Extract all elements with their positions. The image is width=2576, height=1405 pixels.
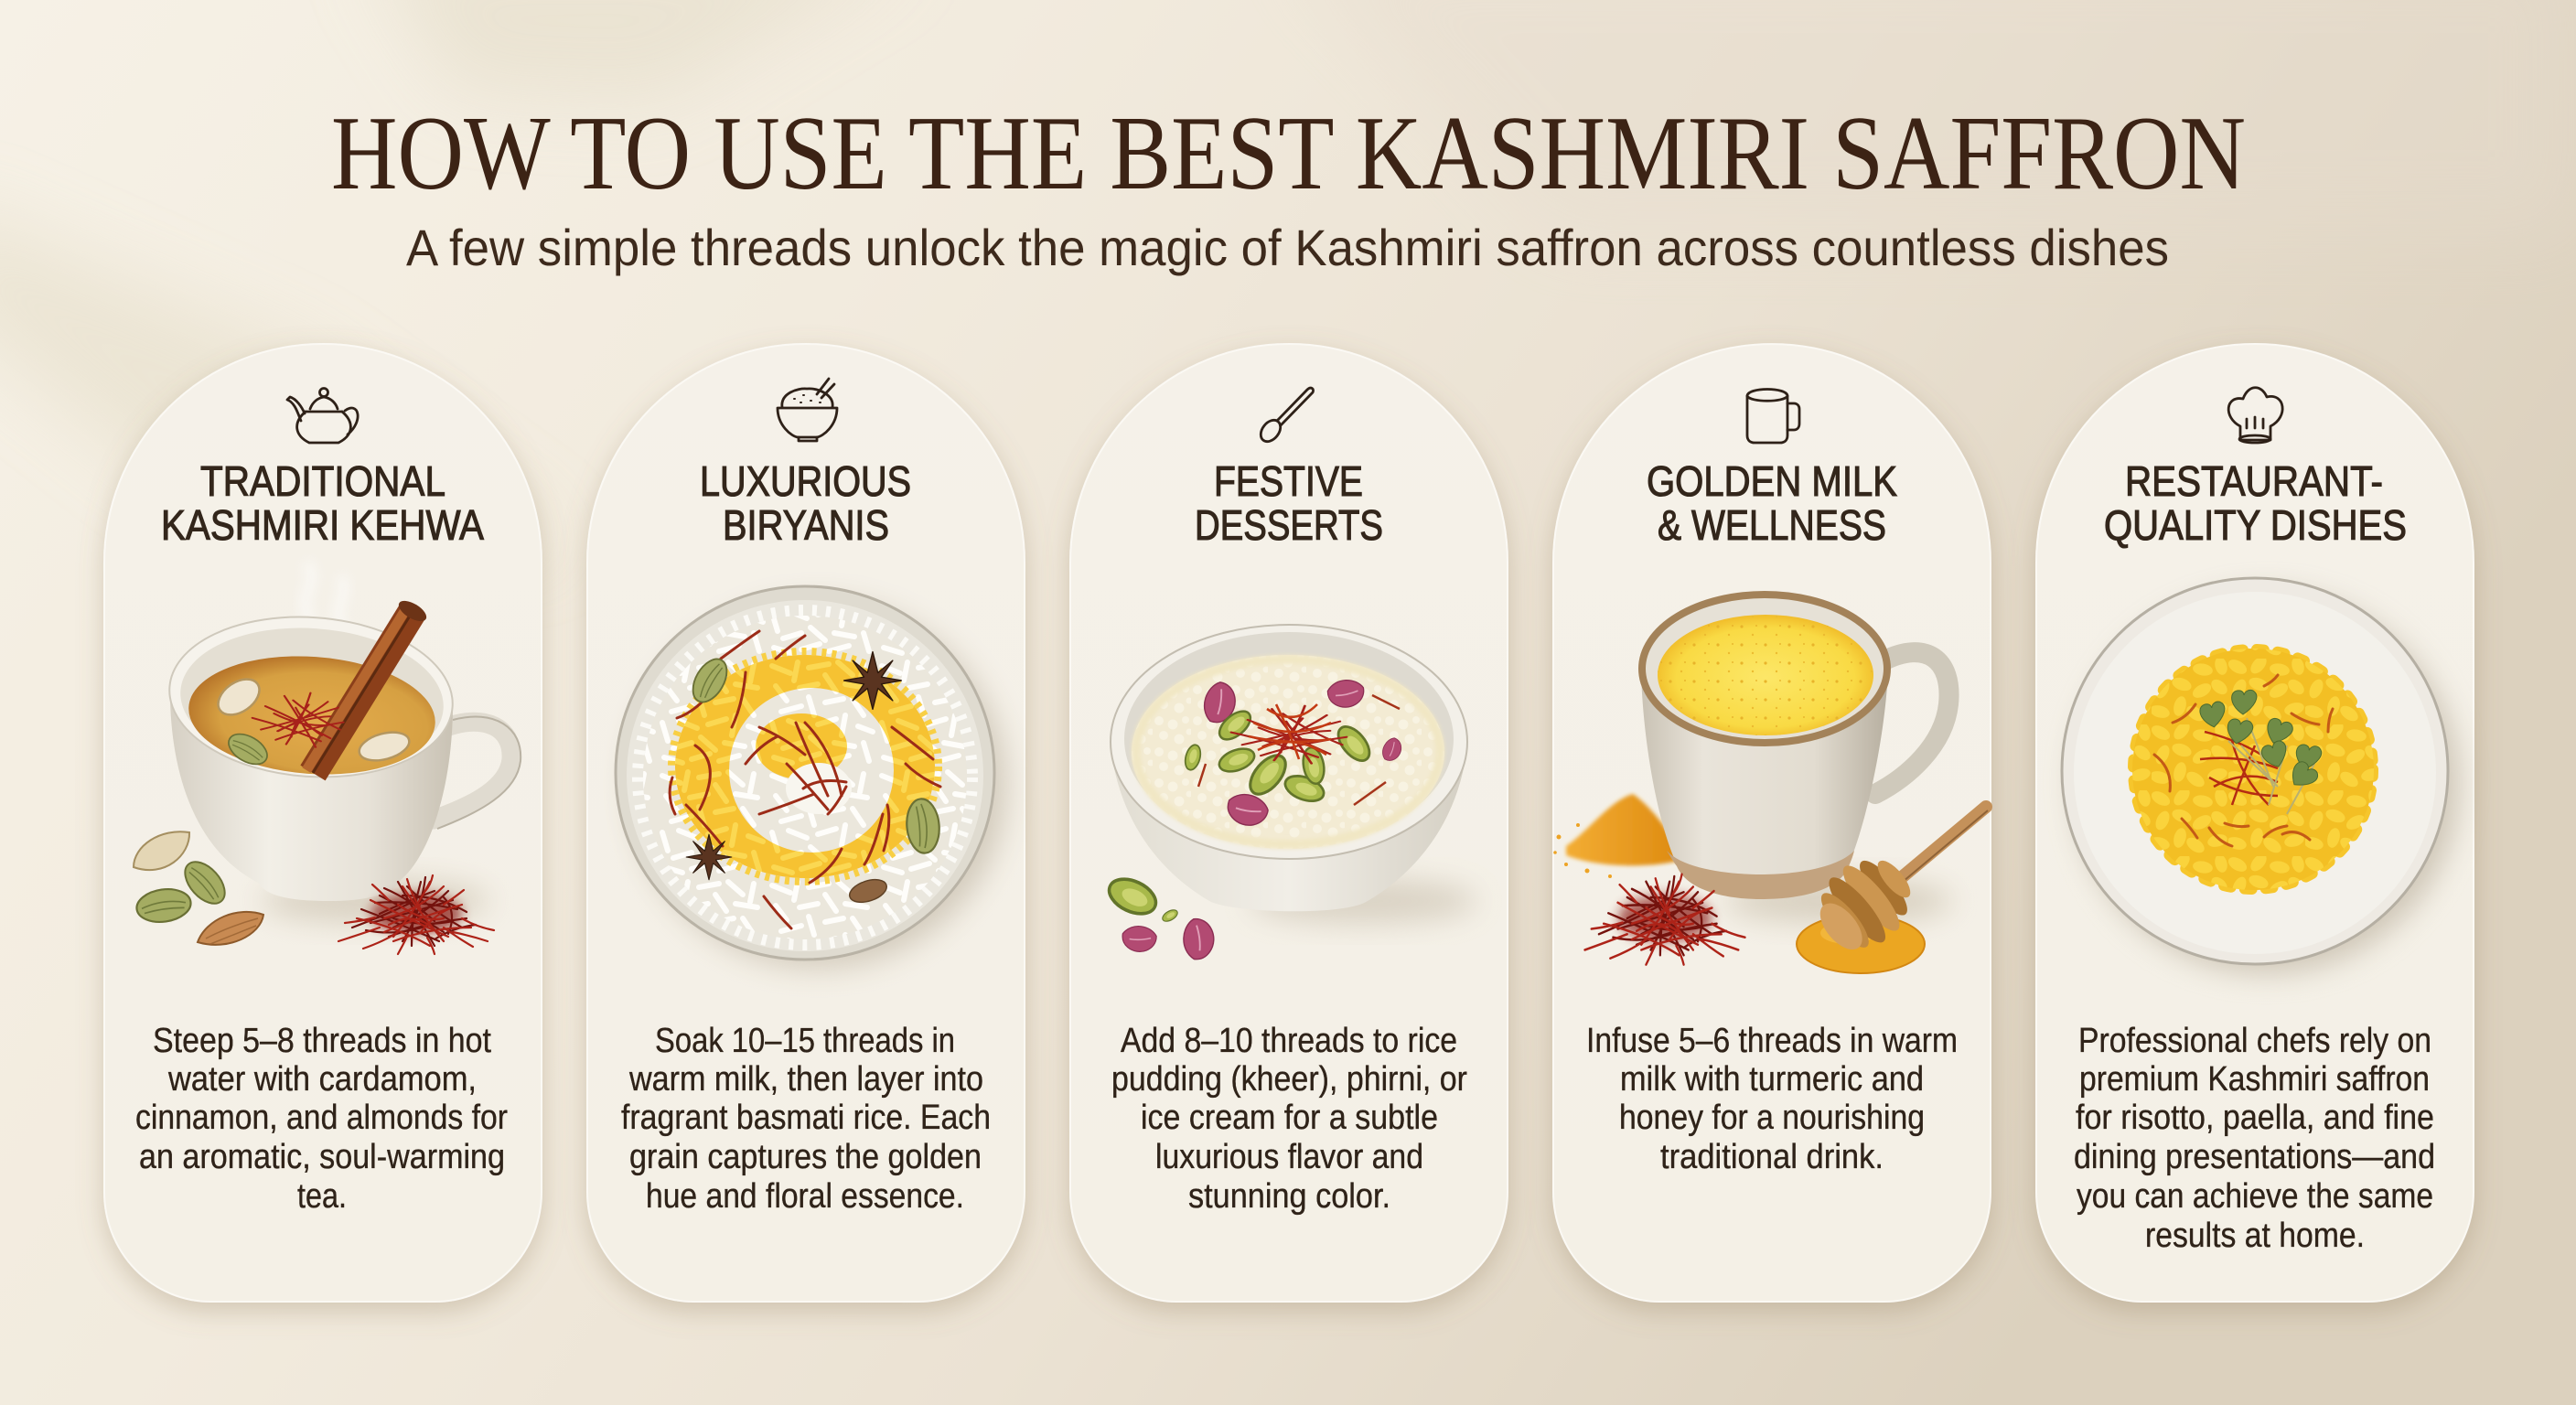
panel: luxurious biryanis — [587, 344, 1025, 1302]
subtitle: A few simple threads unlock the magic of Kashmiri saffron across countless dishes — [406, 219, 2169, 276]
description: milk with turmeric and — [1620, 1060, 1924, 1099]
illustration: kheer bowl — [1104, 625, 1477, 963]
heading: BIRYANIS — [723, 501, 889, 549]
description: premium Kashmiri saffron — [2079, 1060, 2430, 1099]
heading — [1195, 457, 1383, 549]
description: Infuse 5–6 threads in warm — [1586, 1022, 1958, 1060]
description — [1586, 1022, 1958, 1176]
description: grain captures the golden — [629, 1138, 982, 1176]
panel: festive desserts — [1070, 344, 1508, 1302]
heading: FESTIVE — [1214, 457, 1363, 505]
panel: golden milk and wellness — [1553, 344, 1991, 1302]
description — [2074, 1022, 2435, 1255]
description: results at home. — [2145, 1217, 2365, 1255]
icon: teapot — [287, 388, 358, 443]
description: stunning color. — [1188, 1177, 1390, 1216]
title: HOW TO USE THE BEST KASHMIRI SAFFRON — [331, 95, 2246, 212]
heading: TRADITIONAL — [200, 457, 445, 505]
description: an aromatic, soul-warming — [139, 1138, 505, 1176]
description: Professional chefs rely on — [2078, 1022, 2431, 1060]
heading: & WELLNESS — [1658, 501, 1886, 549]
description: you can achieve the same — [2077, 1177, 2433, 1216]
heading: DESSERTS — [1195, 501, 1383, 549]
description: Steep 5–8 threads in hot — [153, 1022, 491, 1060]
description: traditional drink. — [1660, 1138, 1884, 1176]
heading — [161, 457, 484, 549]
description: fragrant basmati rice. Each — [621, 1099, 991, 1137]
description: pudding (kheer), phirni, or — [1111, 1060, 1467, 1099]
description: hue and floral essence. — [646, 1177, 964, 1216]
description: Add 8–10 threads to rice — [1121, 1022, 1457, 1060]
description: dining presentations—and — [2074, 1138, 2435, 1176]
heading: LUXURIOUS — [700, 457, 911, 505]
heading: KASHMIRI KEHWA — [161, 501, 484, 549]
heading: RESTAURANT- — [2125, 457, 2383, 505]
icon: rice bowl — [778, 379, 837, 441]
description: tea. — [297, 1177, 347, 1216]
icon: spoon — [1257, 388, 1314, 445]
description: warm milk, then layer into — [628, 1060, 983, 1099]
illustration: saffron risotto plate — [2062, 578, 2459, 973]
description — [135, 1022, 508, 1216]
description: ice cream for a subtle — [1141, 1099, 1438, 1137]
illustration: biryani plate — [616, 586, 1006, 968]
illustration: golden milk mug — [1553, 595, 1988, 973]
illustration: kehwa tea cup — [134, 563, 521, 954]
heading — [700, 457, 911, 549]
icon: mug — [1747, 390, 1799, 443]
description: Soak 10–15 threads in — [655, 1022, 955, 1060]
heading: QUALITY DISHES — [2104, 501, 2407, 549]
heading: GOLDEN MILK — [1647, 457, 1897, 505]
description: for risotto, paella, and fine — [2076, 1099, 2434, 1137]
description — [1111, 1022, 1467, 1216]
description: honey for a nourishing — [1619, 1099, 1925, 1137]
description — [621, 1022, 991, 1216]
description: water with cardamom, — [167, 1060, 477, 1099]
description: luxurious flavor and — [1155, 1138, 1423, 1176]
heading — [1647, 457, 1897, 549]
panel: restaurant-quality dishes — [2036, 344, 2474, 1302]
panel: traditional kashmiri kehwa — [104, 344, 542, 1302]
description: cinnamon, and almonds for — [135, 1099, 508, 1137]
heading — [2104, 457, 2407, 549]
icon: chef hat — [2228, 388, 2282, 443]
